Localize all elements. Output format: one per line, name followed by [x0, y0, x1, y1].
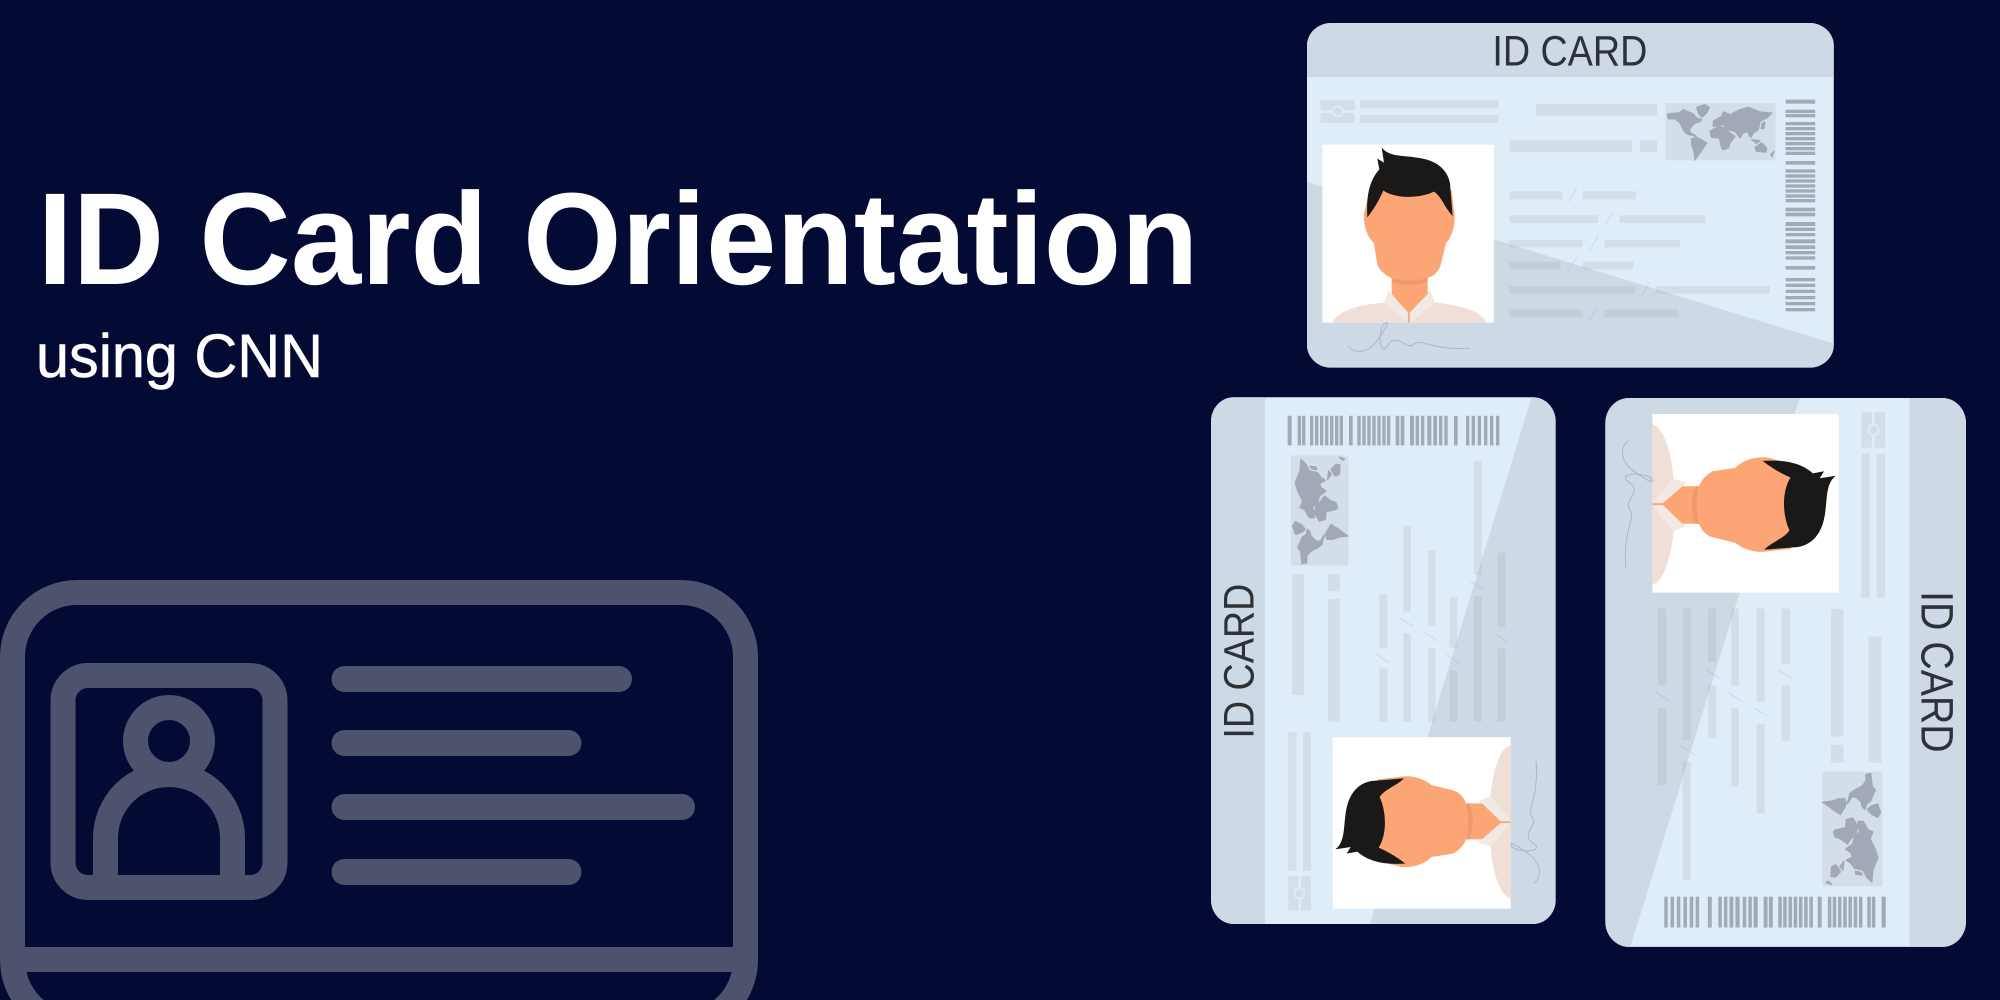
- data rows: [1292, 461, 1508, 722]
- title: ID Card Orientation: [38, 165, 1198, 312]
- world map: [1291, 455, 1348, 565]
- icon: portrait frame: [63, 676, 275, 888]
- card base and header band: [1307, 23, 1834, 368]
- card heading: ID CARD: [1492, 28, 1647, 76]
- barcode: [1664, 897, 1886, 928]
- emblem and top lines: [1861, 412, 1885, 598]
- subtitle: using CNN: [36, 322, 323, 390]
- emblem and top lines: [1321, 100, 1499, 123]
- panel: upright ID card: [1307, 23, 1834, 368]
- signature: [1511, 761, 1539, 883]
- card heading: ID CARD: [1911, 591, 1962, 753]
- card base and header band: [1211, 397, 1556, 924]
- signature: [1622, 440, 1653, 568]
- data rows: [1656, 609, 1881, 880]
- portrait photo: [1322, 145, 1494, 323]
- panel: ID card rotated clockwise: [1605, 398, 1966, 947]
- icon: text lines: [332, 666, 695, 885]
- world map: [1822, 772, 1882, 886]
- panel: ID card rotated counter-clockwise: [1211, 397, 1556, 924]
- barcode: [1786, 100, 1815, 311]
- data rows: [1509, 104, 1770, 320]
- signature: [1348, 323, 1470, 351]
- icon: portrait shoulders: [106, 775, 232, 880]
- icon: card outline and stripe: [12, 592, 746, 1000]
- card heading: ID CARD: [1216, 584, 1264, 739]
- card base and header band: [1605, 398, 1966, 947]
- portrait photo: [1652, 414, 1839, 593]
- portrait photo: [1333, 737, 1511, 909]
- barcode: [1288, 416, 1499, 445]
- world map: [1666, 103, 1776, 160]
- emblem and top lines: [1288, 732, 1311, 910]
- icon: portrait head: [136, 708, 202, 774]
- icon: large ID card outline: [12, 592, 746, 1000]
